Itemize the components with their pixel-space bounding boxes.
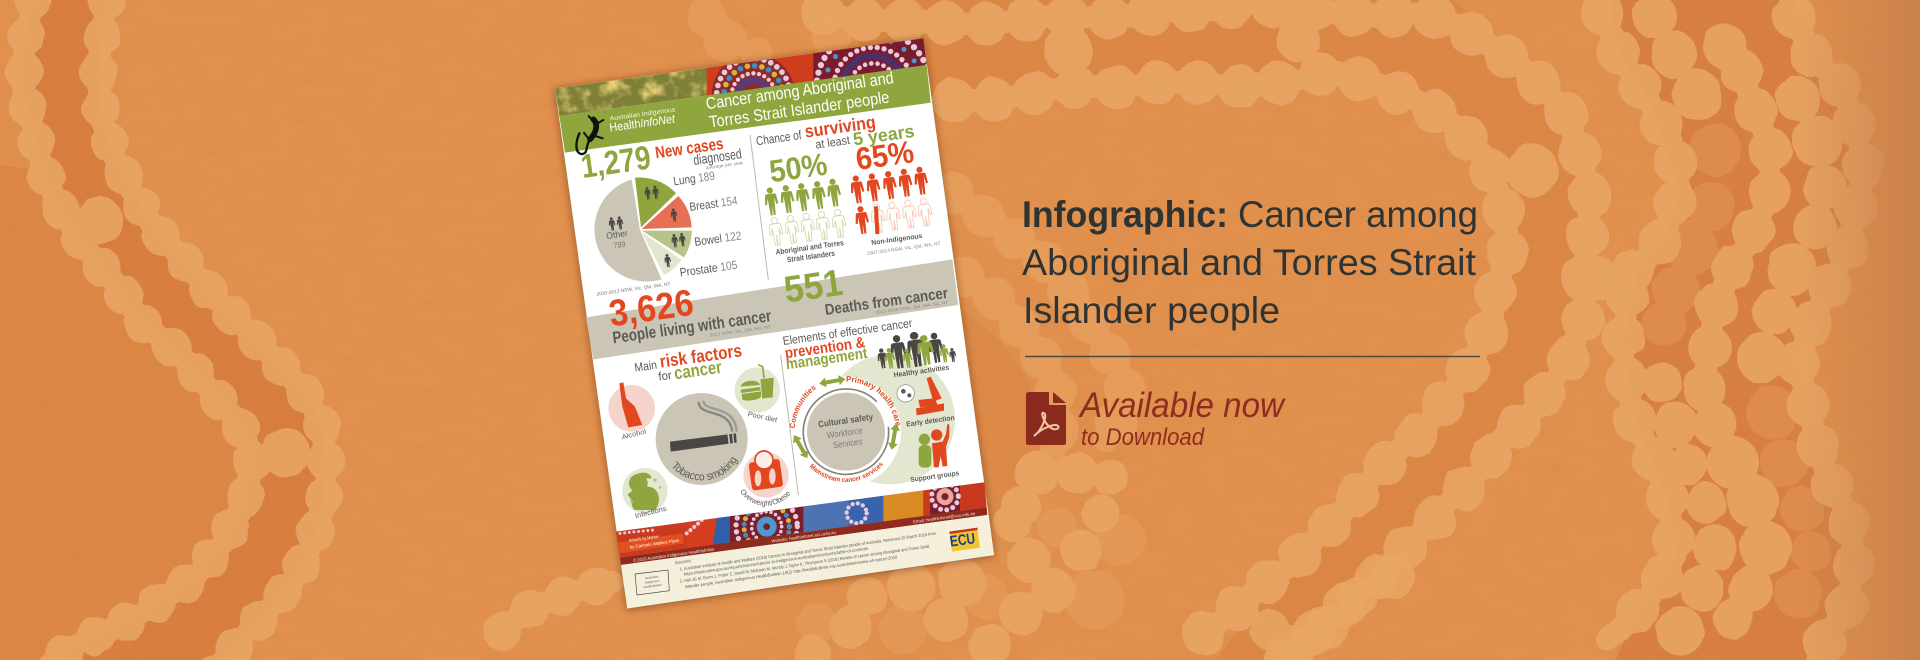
deaths from cancer: 551 bbox=[781, 261, 845, 311]
icon: infections: Infections bbox=[634, 504, 668, 520]
sources text: 2. Hall JG M, Burns J, Potter C, David M, McEwan M, Mundy J, Taylor K, Thompson S (2018) Review of cancer among Aboriginal and Torres Strait bbox=[679, 544, 930, 584]
logo: gecko and HealthInfoNet: HealthInfoNet bbox=[608, 112, 676, 135]
heading: infographic title: Islander people bbox=[1023, 290, 1280, 331]
new cases headline bbox=[579, 134, 744, 186]
pie labels: Bowel 122 bbox=[693, 228, 743, 249]
pie labels: 2010-2013 NSW, Vic, Qld, WA, NT bbox=[596, 281, 671, 297]
cycle diagram: cultural safety: Cultural safety bbox=[818, 412, 874, 429]
icon: overweight/obesity bbox=[741, 450, 790, 508]
survival heading: Chance of bbox=[755, 128, 803, 148]
icon: tobacco smoking: Tobacco smoking bbox=[672, 456, 738, 480]
pie labels: Lung 189 bbox=[672, 169, 716, 188]
dark red contact band: © 2018 Australian Indigenous HealthInfoNet bbox=[633, 547, 715, 563]
prevention heading: management bbox=[785, 345, 868, 373]
people living with cancer: People living with cancer bbox=[611, 306, 773, 347]
bottom artwork strip bbox=[616, 482, 987, 558]
panel divider top bbox=[750, 135, 768, 280]
icon: infections bbox=[622, 468, 668, 520]
Aboriginal survival 50% bbox=[763, 147, 848, 264]
pie chart of cancer types: Other bbox=[606, 228, 628, 241]
prevention heading bbox=[782, 316, 913, 373]
green title banner bbox=[559, 65, 931, 153]
non-Indigenous survival 65%: 65% bbox=[853, 134, 916, 177]
poster title: Torres Strait Islander people bbox=[708, 88, 890, 132]
survival heading: at least bbox=[814, 133, 851, 152]
icon: healthy activities people: Healthy activities bbox=[893, 363, 950, 379]
icon: support groups bbox=[910, 424, 960, 484]
cycle diagram: cultural safety: Primary health care bbox=[846, 376, 900, 426]
dark red contact band: Website: healthinfonet.ecu.edu.au bbox=[771, 530, 837, 544]
people living with cancer: 3,626 bbox=[606, 281, 696, 334]
deaths from cancer: 2012-2016 NSW, Qld, WA, SA, NT bbox=[875, 300, 949, 315]
grey statistics band bbox=[586, 259, 958, 359]
logo: gecko and HealthInfoNet: Australian Indigenous bbox=[609, 106, 676, 123]
cream footer bbox=[621, 515, 994, 608]
icon: PDF document bbox=[1026, 392, 1066, 445]
light backdrop for elements bbox=[825, 354, 955, 484]
pie chart of cancer types: 789 bbox=[613, 240, 627, 250]
icon: early detection microscope: Early detection bbox=[906, 413, 956, 429]
cycle diagram: cultural safety: Services bbox=[832, 436, 863, 450]
new cases headline: New cases bbox=[654, 134, 725, 162]
sources text: https://www.aihw.gov.au/reports/cancer/cancer-in-indigenous-australians/contents/table-of-contents bbox=[683, 546, 868, 577]
ECU logo: ECU bbox=[949, 530, 976, 551]
call to action: available now bbox=[1078, 386, 1287, 451]
cycle diagram: cultural safety: Workforce bbox=[826, 425, 863, 440]
risk factors heading: for bbox=[657, 368, 673, 384]
artwork credit: by Carmelo Wallace Flynn bbox=[629, 538, 680, 550]
dark red contact band bbox=[620, 507, 987, 565]
survival heading: 5 years bbox=[852, 121, 916, 149]
call to action: available now: to Download bbox=[1081, 424, 1205, 451]
pie labels: Prostate 105 bbox=[679, 258, 738, 280]
dark red contact band: Email: healthinfonet@ecu.edu.au bbox=[913, 511, 976, 524]
heading: infographic title: Aboriginal and Torres Strait bbox=[1022, 242, 1477, 283]
sources text: Islander people. Australian Indigenous HealthBulletin 18(2) http://healthbulletin.org.au/articles/review-of-cancer-2018 bbox=[684, 554, 898, 589]
poster sheet bbox=[555, 38, 994, 608]
new cases headline: diagnosed bbox=[692, 145, 743, 168]
cycle diagram: cultural safety bbox=[790, 375, 901, 482]
heading: infographic title: Infographic: bbox=[1022, 194, 1228, 235]
poster title: Cancer among Aboriginal and bbox=[705, 68, 895, 113]
cycle diagram: cultural safety: Mainstream cancer services bbox=[810, 462, 883, 482]
Aboriginal survival 50%: Aboriginal and Torres bbox=[775, 238, 844, 257]
pie labels: Breast 154 bbox=[688, 193, 739, 214]
prevention heading: Elements of effective cancer bbox=[782, 316, 913, 348]
copyright stamp: Australian bbox=[645, 574, 659, 580]
deaths from cancer: Deaths from cancer bbox=[824, 285, 949, 319]
survival heading bbox=[755, 112, 916, 152]
sources text: 1. Australian Institute of Health and Welfare (2018) Cancer in Aboriginal and Torres Strait Islander people of Australia. Retrieved 15 March 2018 from bbox=[679, 531, 937, 572]
icon: support groups: Support groups bbox=[910, 470, 960, 484]
risk factors heading: risk factors bbox=[658, 340, 743, 372]
survival heading: surviving bbox=[803, 112, 877, 142]
heading: infographic title bbox=[1022, 194, 1478, 331]
new cases headline: 1,279 bbox=[579, 140, 653, 186]
icon: healthy activities people bbox=[876, 331, 957, 379]
people living with cancer bbox=[606, 281, 773, 347]
deaths from cancer bbox=[781, 261, 949, 319]
prevention heading: prevention & bbox=[784, 334, 866, 362]
copyright stamp: Indigenous bbox=[645, 579, 660, 585]
people living with cancer: 2012 NSW, Vic, Qld, WA, NT bbox=[709, 324, 771, 338]
icon: alcohol bbox=[608, 382, 655, 441]
risk factors heading bbox=[633, 340, 743, 384]
cycle diagram: cultural safety: Communities bbox=[790, 386, 816, 428]
icon: early detection microscope bbox=[897, 377, 956, 429]
copyright stamp: HealthInfoNet bbox=[643, 583, 662, 589]
artwork credit: Artwork by Marlee bbox=[628, 534, 659, 543]
right edge darkening bbox=[1800, 0, 1920, 660]
call to action: available now: Available now bbox=[1078, 386, 1287, 425]
icon: tobacco smoking bbox=[656, 393, 748, 485]
icon: alcohol: Alcohol bbox=[621, 428, 648, 441]
pie labels bbox=[596, 169, 743, 297]
non-Indigenous survival 65%: Non-Indigenous bbox=[871, 233, 923, 247]
icon: poor diet bbox=[735, 365, 780, 424]
non-Indigenous survival 65% bbox=[849, 134, 941, 256]
poster title bbox=[705, 68, 895, 132]
sources text: Sources: bbox=[674, 558, 692, 565]
Aboriginal survival 50%: 50% bbox=[767, 147, 830, 189]
pie chart of cancer types bbox=[594, 177, 692, 282]
copyright stamp bbox=[635, 570, 669, 595]
top artwork strip bbox=[555, 38, 927, 116]
sources text bbox=[674, 531, 937, 589]
risk factors heading: cancer bbox=[673, 357, 723, 383]
non-Indigenous survival 65%: 2007-2014 NSW, Vic, Qld, WA, NT bbox=[867, 241, 941, 256]
heading: infographic title: Cancer among bbox=[1238, 194, 1478, 235]
icon: overweight/obesity: Overweight/Obese bbox=[741, 490, 790, 508]
logo: gecko and HealthInfoNet bbox=[576, 106, 676, 154]
panel divider bottom bbox=[781, 355, 798, 495]
Aboriginal survival 50%: Strait Islanders bbox=[786, 249, 835, 264]
background: bead chains beside the poster and text bbox=[687, 0, 1415, 660]
artwork credit bbox=[618, 533, 684, 553]
risk factors heading: Main bbox=[633, 358, 658, 375]
poster: infographic thumbnail bbox=[551, 35, 998, 614]
icon: poor diet: Poor diet bbox=[747, 411, 778, 424]
divider rule bbox=[1025, 356, 1480, 358]
new cases headline: average per year bbox=[705, 160, 744, 170]
